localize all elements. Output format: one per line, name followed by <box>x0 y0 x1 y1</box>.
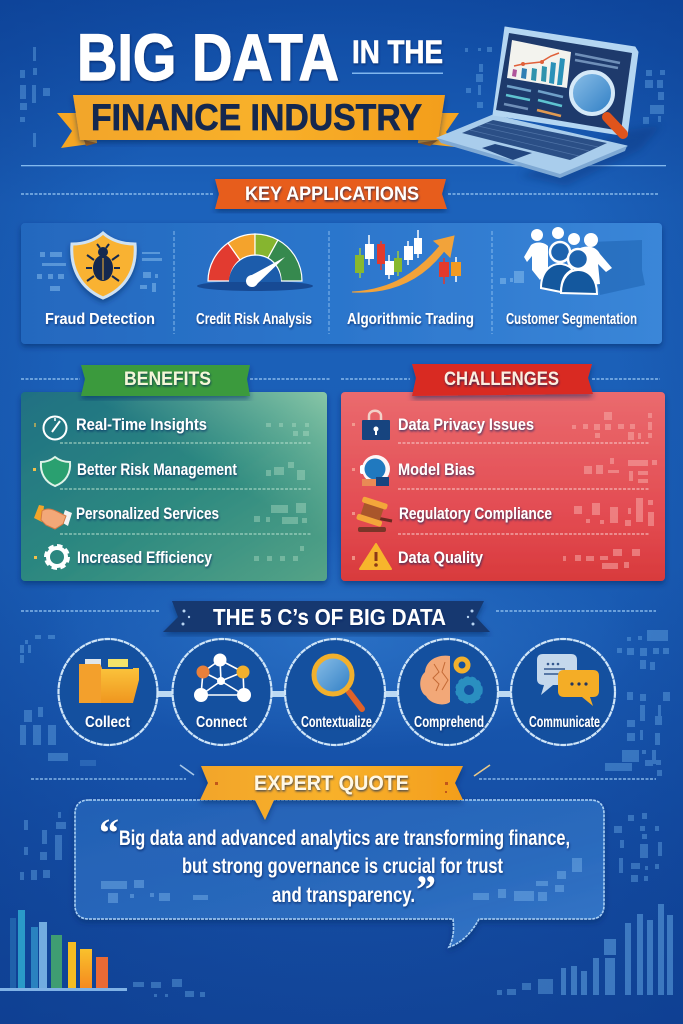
keyboard <box>462 120 607 160</box>
icon: algorithmic trading candles <box>352 230 461 292</box>
icon: credit risk gauge <box>197 234 313 291</box>
section heading: key applications: KEY APPLICATIONS <box>245 184 419 205</box>
banner text: FINANCE INDUSTRY <box>91 97 422 138</box>
quote text: and transparency. <box>272 884 415 907</box>
title: in the: IN THE <box>352 34 443 70</box>
section heading: expert quote: EXPERT QUOTE <box>254 772 409 795</box>
icon: laptop with magnifier <box>437 27 662 186</box>
step: contextualize: Contextualize <box>301 714 372 731</box>
icon: fraud detection shield <box>72 233 135 298</box>
title underline <box>352 72 443 74</box>
process: 5 Cs chain <box>58 639 615 745</box>
row: personalized services <box>34 504 219 529</box>
section heading: benefits <box>21 365 331 396</box>
quote bubble <box>75 800 604 947</box>
step: collect: Collect <box>85 714 130 731</box>
row: better risk management <box>41 457 237 486</box>
row: model bias <box>360 455 475 486</box>
section heading: the 5 Cs <box>21 601 656 632</box>
screen lines <box>504 54 620 116</box>
chart card <box>507 40 571 88</box>
bar chart: bottom left <box>0 910 127 991</box>
magnifier <box>607 117 623 134</box>
label: Credit Risk Analysis <box>196 311 312 328</box>
row: increased efficiency: Increased Efficiency <box>77 548 212 567</box>
step: connect: Connect <box>196 714 247 731</box>
row: real-time insights: Real-Time Insights <box>76 415 207 434</box>
row: regulatory compliance: Regulatory Compliance <box>399 504 552 523</box>
step: communicate: Communicate <box>529 714 600 731</box>
row: regulatory compliance <box>356 496 552 532</box>
row: data quality <box>360 544 483 569</box>
title banner <box>57 95 459 148</box>
step: comprehend: Comprehend <box>414 714 484 731</box>
step: contextualize <box>285 639 385 745</box>
quote text: but strong governance is crucial for trust <box>182 855 503 878</box>
section heading: challenges <box>341 364 660 396</box>
step: communicate <box>511 639 615 745</box>
row: data privacy issues <box>362 411 534 440</box>
row: model bias: Model Bias <box>398 460 475 479</box>
bar chart: bottom right <box>561 904 673 995</box>
label: Algorithmic Trading <box>347 311 474 328</box>
panel: key applications <box>21 223 662 344</box>
step: connect <box>172 639 272 745</box>
section heading: benefits: BENEFITS <box>124 369 211 390</box>
panel: benefits <box>21 392 327 581</box>
quote text: ” <box>416 867 436 912</box>
section heading: key applications <box>21 179 659 209</box>
decorative data pixels <box>37 252 524 292</box>
trackpad <box>482 144 532 160</box>
section heading: challenges: CHALLENGES <box>444 369 559 390</box>
row: better risk management: Better Risk Management <box>77 460 237 479</box>
title: big data: BIG DATA <box>77 20 339 94</box>
screen <box>493 27 638 136</box>
row: data quality: Data Quality <box>398 548 483 567</box>
step: collect <box>58 639 158 745</box>
quote text <box>99 810 570 912</box>
quote text: “ <box>99 810 119 855</box>
title <box>57 20 459 148</box>
row: data privacy issues: Data Privacy Issues <box>398 415 534 434</box>
section heading: the 5 Cs: THE 5 C’s OF BIG DATA <box>213 604 446 630</box>
icon: customer segmentation people <box>524 227 612 294</box>
row: personalized services: Personalized Services <box>76 504 219 523</box>
step: comprehend <box>398 639 498 745</box>
section heading: expert quote <box>31 765 656 820</box>
horizontal divider <box>21 165 666 166</box>
panel: challenges <box>341 392 665 581</box>
label: Fraud Detection <box>45 311 155 328</box>
row: real-time insights <box>44 415 207 440</box>
laptop base <box>437 115 627 174</box>
row: increased efficiency <box>46 546 212 568</box>
